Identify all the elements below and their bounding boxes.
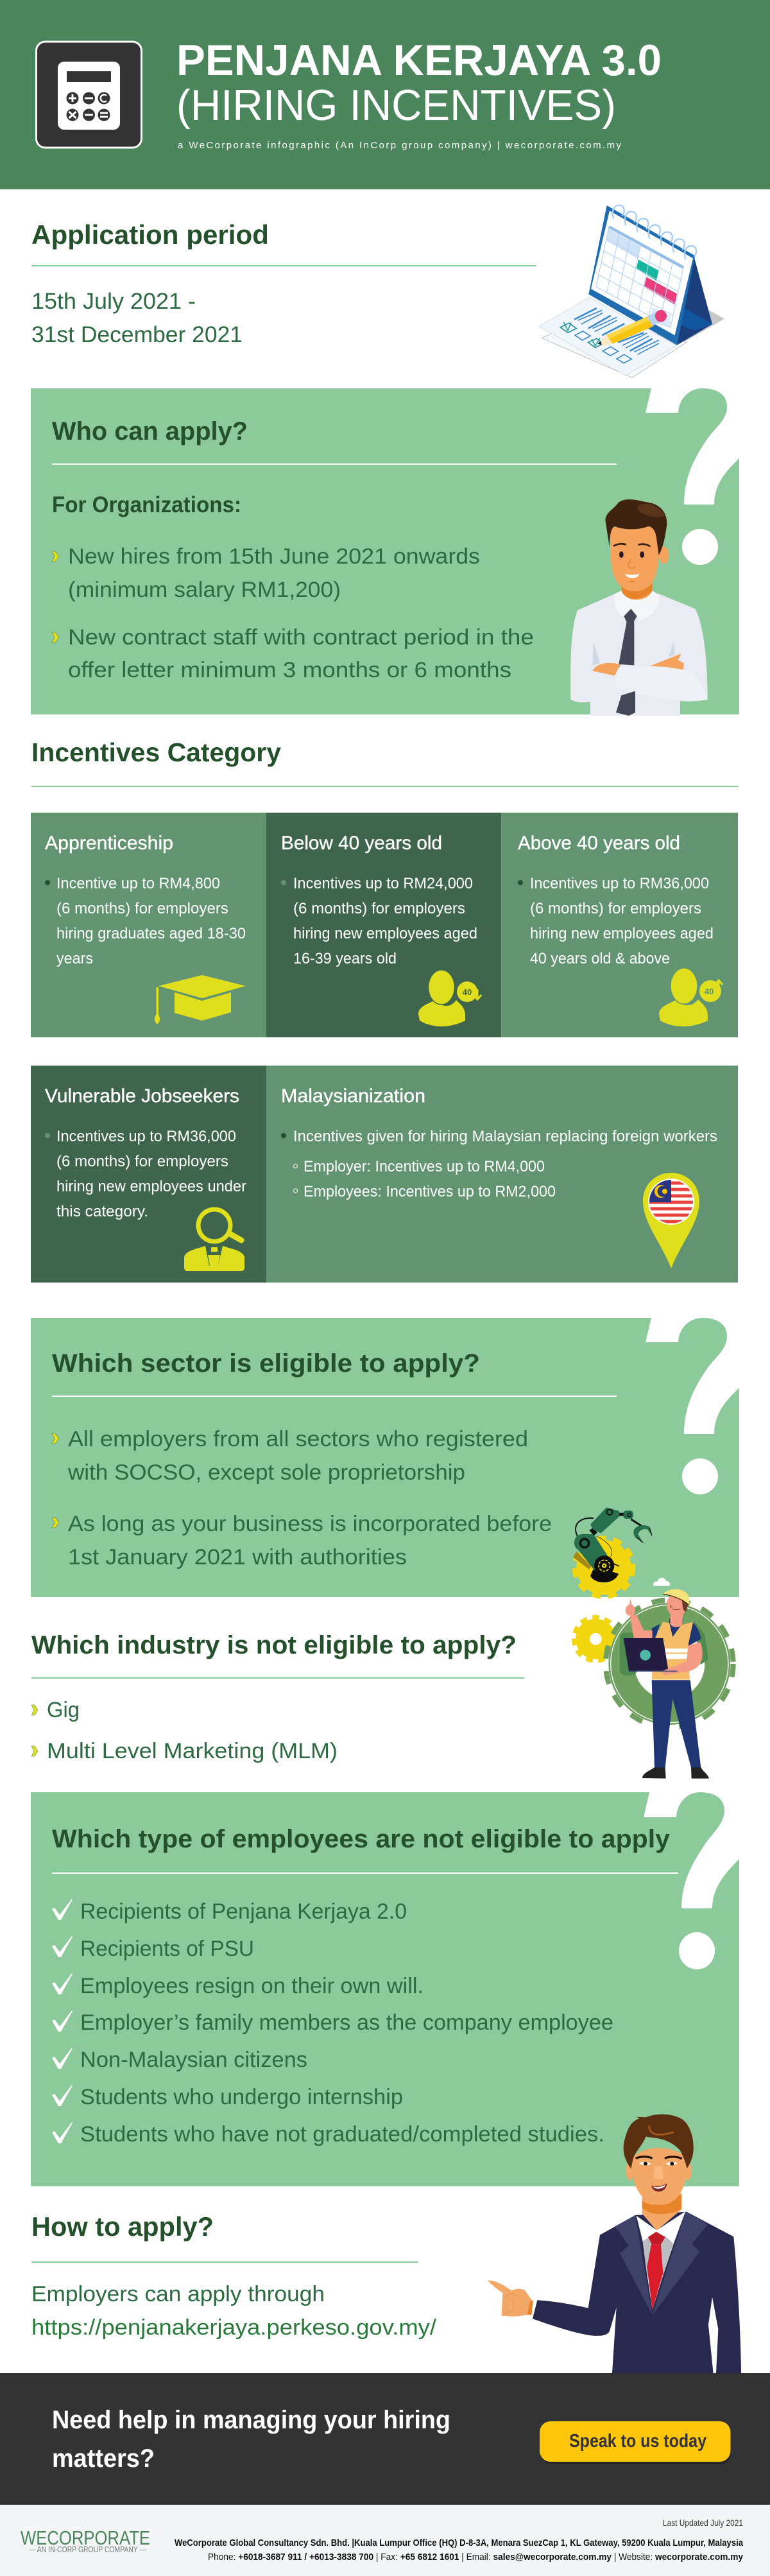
heading: Which sector is eligible to apply? — [52, 1349, 480, 1378]
engineer — [620, 1589, 709, 1779]
icon: big question mark — [644, 1792, 739, 1969]
item: family members: Employer’s family members as the company employee — [80, 2010, 613, 2035]
card: above 40 years old: Incentives up to RM36,000 — [530, 875, 709, 892]
robot arm — [573, 1507, 652, 1582]
section: industry not eligible — [31, 1631, 524, 1763]
section heading: incentives category: Incentives Category — [31, 738, 281, 767]
heading: Which industry is not eligible to apply? — [31, 1631, 517, 1659]
dates: 15th July 2021 - — [31, 289, 196, 314]
card: malaysianization — [266, 1066, 738, 1283]
bullet: gig: Gig — [47, 1698, 80, 1722]
bullet: gig — [31, 1698, 80, 1722]
card: apprenticeship: Apprenticeship — [45, 833, 173, 854]
card: malaysianization: Incentives given for hiring Malaysian replacing foreign workers — [293, 1128, 717, 1145]
heading: Who can apply? — [52, 417, 248, 445]
icon: calculator — [36, 42, 141, 148]
last updated: Last Updated July 2021 — [663, 2518, 743, 2528]
instructions: Employers can apply through — [31, 2282, 325, 2306]
bullet: incorporated: As long as your business is incorporated before — [68, 1512, 552, 1536]
subheading: For Organizations: — [52, 492, 241, 517]
logo: WECORPORATE — [21, 2527, 150, 2549]
bullet: new hires: New hires from 15th June 2021 onwards — [68, 544, 480, 569]
subtitle: a WeCorporate infographic (An InCorp group company) | wecorporate.com.my — [178, 140, 622, 151]
dates: 31st December 2021 — [31, 322, 243, 347]
bullet: SOCSO: with SOCSO, except sole proprietorship — [67, 1460, 465, 1485]
illustration: man with folded arms — [570, 499, 708, 716]
card: below 40 years old: Incentives up to RM24,000 — [293, 875, 473, 892]
card: below 40 years old — [266, 813, 501, 1037]
item: PSU: Recipients of PSU — [80, 1937, 254, 1961]
bullet: MLM: Multi Level Marketing (MLM) — [47, 1739, 338, 1763]
item: internship: Students who undergo internship — [80, 2085, 403, 2109]
title — [176, 36, 662, 130]
footer — [0, 2505, 770, 2576]
section: how to apply — [31, 2211, 437, 2340]
small yellow gear — [574, 1617, 617, 1661]
logo: — AN IN-CORP GROUP COMPANY — — [29, 2545, 146, 2554]
icon: Malaysia flag pin — [643, 1173, 699, 1268]
card: vulnerable jobseekers: this category. — [56, 1203, 148, 1220]
panel: who can apply — [31, 388, 739, 714]
message: Need help in managing your hiring — [52, 2406, 450, 2434]
title: PENJANA KERJAYA 3.0 — [176, 36, 662, 85]
heading: Which type of employees are not eligible to apply — [52, 1825, 671, 1853]
illustration: robot arm, gears and engineer — [573, 1507, 733, 1779]
card: above 40 years old — [501, 813, 738, 1037]
card: apprenticeship: years — [56, 950, 93, 967]
illustration: man in suit pointing — [488, 2114, 741, 2373]
button: Speak to us today — [569, 2431, 706, 2451]
item: non-Malaysian: Non-Malaysian citizens — [80, 2048, 307, 2072]
icon: person over 40 — [659, 968, 723, 1026]
illustration: desk calendar and checklist — [539, 205, 724, 377]
card: below 40 years old: 16-39 years old — [293, 950, 397, 967]
checklist — [52, 1899, 613, 2147]
card: below 40 years old: Below 40 years old — [281, 833, 442, 854]
header banner — [0, 0, 770, 189]
bullet: incorporated — [52, 1512, 552, 1569]
card: above 40 years old: hiring new employees aged — [530, 925, 714, 942]
icon: person under 40 — [418, 970, 481, 1026]
card: above 40 years old: Above 40 years old — [518, 833, 680, 854]
card: apprenticeship: (6 months) for employers — [56, 900, 228, 917]
dates — [31, 289, 243, 347]
item: resign: Employees resign on their own will. — [80, 1974, 424, 1998]
card: vulnerable jobseekers: hiring new employees under — [56, 1178, 246, 1195]
contact details: Phone: +6018-3687 911 / +6013-3838 700 | Fax: +65 6812 1601 | Email: sales@wecorporate.com.my | Website: wecorporate.com.my — [208, 2552, 744, 2563]
bullet: new hires: (minimum salary RM1,200) — [68, 578, 341, 602]
card: vulnerable jobseekers: Incentives up to RM36,000 — [56, 1128, 236, 1145]
instructions: https://penjanakerjaya.perkeso.gov.my/ — [31, 2315, 437, 2340]
icon: cloud — [653, 1578, 670, 1586]
card: malaysianization: Malaysianization — [281, 1085, 425, 1107]
icon: big question mark — [646, 1318, 739, 1494]
panel: employees not eligible — [31, 1792, 739, 2186]
bullet: SOCSO: All employers from all sectors who registered — [68, 1427, 528, 1451]
message: matters? — [52, 2444, 155, 2473]
bullet: contract staff: offer letter minimum 3 months or 6 months — [68, 658, 511, 682]
icon: magnifier over person — [184, 1209, 244, 1271]
heading: Application period — [31, 220, 269, 250]
instructions — [31, 2282, 437, 2340]
icon: big question mark — [646, 388, 739, 565]
card: above 40 years old: (6 months) for employers — [530, 900, 701, 917]
bullet: SOCSO — [52, 1427, 528, 1485]
card: above 40 years old: 40 years old & above — [530, 950, 670, 967]
icon: person over 40: 40 — [705, 987, 714, 996]
button — [540, 2421, 731, 2464]
heading: How to apply? — [31, 2211, 214, 2242]
card: below 40 years old: hiring new employees aged — [293, 925, 477, 942]
card: vulnerable jobseekers: Vulnerable Jobseekers — [45, 1085, 239, 1107]
message — [52, 2406, 450, 2473]
card: malaysianization: Employer: Incentives up to RM4,000 — [304, 1158, 545, 1175]
bullet: incorporated: 1st January 2021 with authorities — [68, 1545, 407, 1569]
card: below 40 years old: (6 months) for employers — [293, 900, 465, 917]
card: apprenticeship: Incentive up to RM4,800 — [56, 875, 220, 892]
bullet: contract staff: New contract staff with contract period in the — [68, 625, 534, 650]
card: vulnerable jobseekers — [31, 1066, 266, 1283]
bullet: new hires — [52, 544, 480, 602]
title: (HIRING INCENTIVES) — [176, 81, 616, 130]
card: vulnerable jobseekers: (6 months) for employers — [56, 1153, 228, 1170]
card: apprenticeship: hiring graduates aged 18-30 — [56, 925, 246, 942]
call to action band — [0, 2373, 770, 2505]
section: application period — [31, 220, 536, 347]
panel: which sector is eligible — [31, 1318, 739, 1597]
item: not graduated: Students who have not graduated/completed studies. — [80, 2122, 604, 2147]
icon: person under 40: 40 — [463, 987, 472, 997]
large green gear — [606, 1600, 733, 1727]
logo — [21, 2527, 150, 2554]
card: apprenticeship — [31, 813, 266, 1037]
icon: graduation cap — [155, 975, 246, 1024]
item: Penjana Kerjaya 2.0: Recipients of Penjana Kerjaya 2.0 — [80, 1899, 407, 1924]
card: malaysianization: Employees: Incentives up to RM2,000 — [304, 1183, 556, 1200]
bullet: contract staff — [52, 625, 534, 682]
robot gear — [575, 1538, 633, 1596]
